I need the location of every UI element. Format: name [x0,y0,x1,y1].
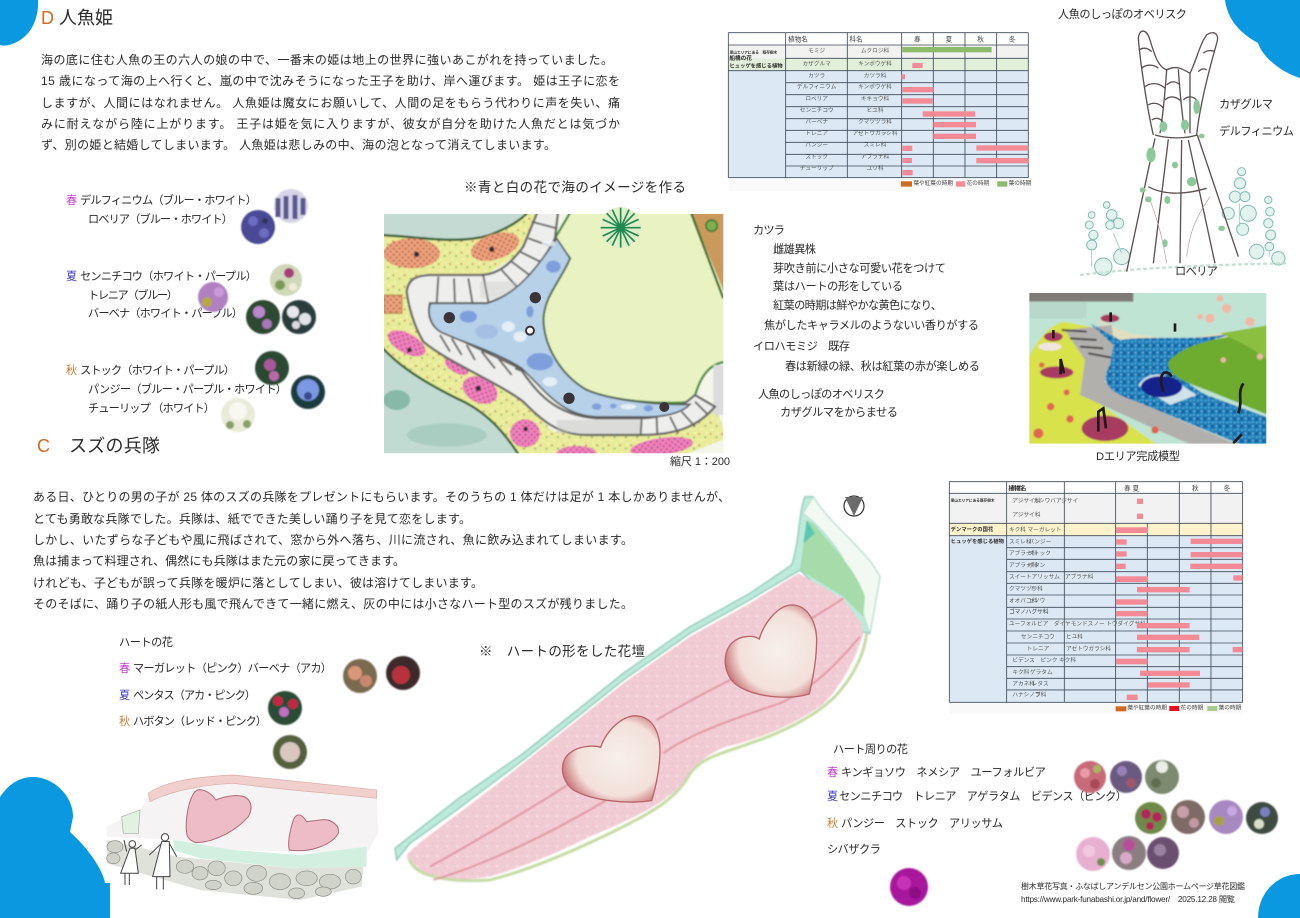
table: D area planting calendar: バーベナ [805,118,828,125]
table: C area planting calendar: ヒユ科 [1066,632,1083,640]
table: C area planting calendar: アジサイ科 [1012,511,1041,519]
table: C area planting calendar: カシワバアジサイ [1033,497,1078,504]
text block: D story [41,52,620,152]
table: C area planting calendar: ハナシノブ科 [1012,691,1047,699]
flower list: around hearts: ハート周りの花 [833,743,908,756]
heading: D 人魚姫: 人魚姫 [59,8,113,28]
lime bed [1027,322,1160,447]
caption: ハートの形: ※ ハートの形をした花壇 [479,644,645,659]
table: C area planting calendar: ラ [1035,692,1041,699]
table: D area planting calendar: 植物名 [788,34,808,43]
table: C area planting calendar: パンジー [1028,538,1052,545]
flower list: D area seasons: 秋 [66,363,77,377]
heading: C スズの兵隊: スズの兵隊 [69,436,160,456]
text block: plant notes: カツラ [753,224,785,237]
table: C area planting calendar: アブラナ科 [1065,573,1094,581]
walkway [407,210,715,435]
table: D area planting calendar [728,33,1032,191]
flower photos: hearts [268,656,420,769]
flower list: D area seasons [66,193,287,415]
flower list: hearts: マーガレット（ピンク）バーベナ（アカ） [133,662,332,675]
hearts [562,716,660,802]
table: C area planting calendar: 葉の時期 [1219,703,1242,711]
table: C area planting calendar: ゴマノハグサ科 [1009,608,1049,616]
table: D area planting calendar: アブラナ科 [861,152,889,160]
corner decoration: top right [1225,0,1300,78]
table: D area planting calendar: 船橋の花 [729,54,752,62]
caption: model: Dエリア完成模型 [1096,449,1180,463]
text block: D story: ず、別の姫と結婚してしまいます。 人魚姫は悲しみの中、海の泡となって消えてしまいます。 [41,137,556,152]
footer credit: 樹木草花写真・ふなばしアンデルセン公園ホームページ草花図鑑 [1021,881,1245,891]
table: D area planting calendar: スミレ科 [864,141,887,149]
table: C area planting calendar: アブラナ科 [1009,549,1038,557]
table: C area planting calendar: 春 夏 [1124,483,1140,492]
flower bed [380,210,727,457]
table: D area planting calendar: ストック [805,153,828,160]
flower list: hearts: ペンタス（アカ・ピンク） [133,689,256,702]
text block: D story: 海の底に住む人魚の王の六人の娘の中で、一番末の姫は地上の世界に強いあこがれを持っていました。 [41,52,613,67]
table: D area planting calendar: 葉の時期 [1009,179,1032,187]
table: C area planting calendar: ュソウ [1028,596,1045,604]
flower list: D area seasons: センニチコウ（ホワイト・パープル） [80,270,257,283]
table: D area planting calendar: 葉や紅葉の時期 [913,179,953,187]
flower list: D area seasons: ストック（ホワイト・パープル） [80,364,235,377]
table: C area planting calendar: トレニア [1027,645,1050,652]
table: D area planting calendar: ヒユ科 [867,106,884,114]
flower list: around hearts [827,743,1127,856]
table: C area planting calendar: 花の時期 [1181,703,1204,711]
text block: plant notes: 焦がしたキャラメルのようないい香りがする [764,318,979,332]
flower list: hearts: ハボタン（レッド・ピンク） [133,715,267,728]
table: D area planting calendar: ムクロジ科 [861,47,889,55]
table: D area planting calendar: 夏 [946,35,953,43]
table: D area planting calendar: カツラ科 [864,71,887,79]
caption: 海のイメージ: ※青と白の花で海のイメージを作る [464,180,686,195]
walkway [1065,325,1243,447]
table: C area planting calendar: 植物名 [1008,484,1026,492]
table: C area planting calendar: ヒュッゲを感じる植物 [951,537,1005,545]
table: D area planting calendar: ユリ科 [867,164,884,172]
green strip [173,840,367,868]
text block: D story: 15 歳になって海の上へ行くと、嵐の中で沈みそうになった王子を助け、岸へ運びます。 姫は王子に恋を [41,73,620,88]
flower list: D area seasons: ロベリア（ブルー・ホワイト） [88,212,233,226]
text block: plant notes: イロハモミジ 既存 [753,339,850,353]
table: C area planting calendar: 科名 [1011,484,1023,492]
icon: north marker [844,496,864,516]
plan drawing: D area pond map [380,207,727,461]
scale label: 縮尺 1：200 [670,454,730,468]
pond [429,238,690,417]
obelisk labels: デルフィニウム [1219,124,1294,138]
text block: C story: しかし、いたずらな子どもや風に飛ばされて、窓から外へ落ち、川に流され、魚に飲み込まれてしまいます。 [33,532,633,547]
table: C area planting calendar: 冬 [1224,483,1231,492]
table: C area planting calendar: オオバコ科 [1009,596,1038,604]
text block: C story: けれども、子どもが誤って兵隊を暖炉に落としてしまい、彼は溶けてしまいます。 [33,575,483,590]
pink beds [387,330,426,358]
table: C area planting calendar: スイートアリッサム [1009,574,1060,581]
people [121,834,177,889]
table: C area planting calendar: デンマークの国花 [951,525,994,533]
flower photos: around hearts [890,760,1278,906]
text block: C story [33,489,730,611]
obelisk labels: カザグルマ [1219,97,1273,111]
flower list: hearts: 夏 [119,689,130,702]
corner decoration: bottom left [0,777,110,918]
delphinium flowers [1085,168,1285,275]
footer credit: https://www.park-funabashi.or.jp/and/flower/ 2025.12.28 閲覧 [1021,894,1235,904]
table: C area planting calendar: 葉や紅葉の時期 [1127,703,1167,711]
island lawn [1168,333,1270,416]
flower list: around hearts: キンギョソウ ネメシア ユーフォルビア [841,766,1046,779]
table: D area planting calendar: 科名 [849,34,863,43]
table: C area planting calendar: ボタン [1028,561,1046,569]
tree symbol [600,207,641,248]
flower list: around hearts: シバザクラ [827,843,881,856]
table: C area planting calendar: ト [1030,587,1036,593]
red beds [383,238,440,268]
top left slope [384,214,526,240]
table: C area planting calendar: ビデンス ピンク キク科 [1012,656,1076,664]
obelisk labels: 人魚のしっぽのオベリスク [1058,8,1187,21]
table: D area planting calendar: 里山エリアにある 既存樹木 [730,49,778,54]
table: D area planting calendar: ロベリア [805,95,828,102]
elevation sketch: heart bed with people [107,775,378,900]
flower list: hearts [119,636,332,728]
flower list: D area seasons: デルフィニウム（ブルー・ホワイト） [80,193,257,207]
table: D area planting calendar: クマツヅラ科 [858,117,892,125]
flower list: D area seasons: バーベナ（ホワイト・パープル） [88,307,243,320]
obelisk labels: ロベリア [1175,266,1218,278]
lower slope [384,350,518,454]
text block: D story: みに耐えながら陸に上がります。 王子は姫を気に入りますが、彼女が自分を助けた人魚だとは気づか [41,116,620,131]
lower border [410,633,867,881]
stone wall [107,840,363,900]
text block: C story: ある日、ひとりの男の子が 25 体のスズの兵隊をプレゼントにもらいます。そのうちの 1 体だけは足が 1 本しかありませんが、 [33,489,730,504]
table: C area planting calendar: ゲラタム [1030,668,1053,676]
corner decoration: bottom right [1258,874,1300,918]
flower list: hearts: 秋 [119,714,130,728]
text block: C story: そのそばに、踊り子の紙人形も風で飛んできて一緒に燃え、灰の中には小さなハート型のスズが残りました。 [33,596,633,611]
table: C area planting calendar: アカネ科 [1012,679,1035,687]
text block: plant notes: 紅葉の時期は鮮やかな黄色になり、 [773,298,942,312]
river [1090,323,1270,447]
flower list: around hearts: センニチコウ トレニア アゲラタム ビデンス（ピンク） [839,789,1127,803]
inner lines [430,598,860,880]
flower list: around hearts: 春 [827,766,838,779]
heading: D 人魚姫: D [41,8,54,28]
table: C area planting calendar: 里山エリアにある既存樹木 [951,498,995,503]
table: C area planting calendar: スミレ科 [1009,537,1032,545]
table: C area planting calendar: ユーフォルビア ダイヤモンドスノー トウダイグサ科 [1009,620,1146,628]
text block: plant notes: カザグルマをからませる [780,405,898,419]
flower list: D area seasons: チューリップ （ホワイト） [88,402,215,415]
table: D area planting calendar: ヒュッゲを感じる植物 [729,62,783,70]
obelisk drawing [1080,31,1287,275]
table: C area planting calendar: レタス [1032,679,1049,687]
flower list: D area seasons: 春 [66,194,77,207]
hearts [186,790,251,843]
flower list: hearts: 春 [119,662,130,675]
corner decoration: top left [0,0,38,46]
text block: plant notes: 春は新緑の緑、秋は紅葉の赤が楽しめる [785,359,980,373]
flower list: D area seasons: トレニア（ブルー） [88,288,178,302]
plan drawing: heart flower bed [395,497,880,881]
text block: D story: しますが、人間にはなれません。 人魚姫は魔女にお願いして、人間の足をもらう代わりに声を失い、痛 [41,95,620,110]
table: D area planting calendar: 冬 [1009,34,1016,43]
table: D area planting calendar: カザグルマ [803,60,831,68]
text block: plant notes: 雌雄異株 [773,242,816,256]
flower list: around hearts: 秋 [827,816,838,830]
table: D area planting calendar: キンポウゲ科 [858,83,892,91]
table: D area planting calendar: アゼトウガラシ科 [852,129,898,137]
table: D area planting calendar: モミジ [808,48,825,55]
table: C area planting calendar: キク科 マーガレット [1009,526,1061,534]
table: C area planting calendar: キク科 [1012,668,1030,676]
flower list: around hearts: パンジー ストック アリッサム [841,817,1003,830]
flower photos: D area [198,189,325,432]
table: D area planting calendar: チューリップ [800,165,834,172]
table: D area planting calendar: 花の時期 [967,179,990,187]
text block: plant notes: 人魚のしっぽのオベリスク [758,388,885,401]
table: D area planting calendar: トレニア [805,130,828,137]
teal edge and north tip [395,497,880,860]
table: D area planting calendar: 春 [914,34,921,43]
flower list: hearts: ハートの花 [119,636,173,649]
brown corner [692,214,724,292]
text block: plant notes: 芽吹き前に小さな可愛い花をつけて [773,261,946,275]
table: D area planting calendar: センニチコウ [800,106,834,114]
obelisk labels [1058,8,1294,278]
flower list: D area seasons: 夏 [66,270,77,283]
tail fins [1138,31,1218,135]
green patch [800,520,865,617]
footer credit [1021,881,1245,904]
table: D area planting calendar: デルフィニウム [797,83,837,91]
text block: plant notes: 葉はハートの形をしている [773,279,903,293]
frame [1127,135,1238,272]
flower list: around hearts: 夏 [827,790,838,803]
table: C area planting calendar: ストック [1028,550,1051,557]
table: C area planting calendar: アジサイ科 [1012,496,1041,504]
heading: C スズの兵隊: C [37,436,50,456]
table: C area planting calendar: クマツヅラ科 [1009,585,1043,593]
table: D area planting calendar: パンジー [805,142,828,149]
table: C area planting calendar: センニチコウ [1021,632,1055,640]
table: D area planting calendar: カツラ [808,72,825,79]
lawn [543,210,727,403]
text block: C story: 魚は捕まって料理され、偶然にも兵隊はまた元の家に戻ってきます。 [33,553,405,568]
photo: D area completed model [1027,290,1270,447]
table: D area planting calendar: 秋 [977,34,984,43]
pink area [407,573,863,879]
table: C area planting calendar: アブラナ科 [1009,561,1038,569]
text block: C story: とても勇敢な兵隊でした。兵隊は、紙でできた美しい踊り子を見て恋をします。 [33,511,471,526]
text block: plant notes [753,224,980,419]
beds and trees [1040,314,1128,441]
table: D area planting calendar: キキョウ科 [861,94,889,102]
flower list: D area seasons: パンジー（ブルー・パープル・ホワイト） [88,382,287,396]
table: D area planting calendar: キンポウゲ科 [858,60,892,68]
table: C area planting calendar: アゼトウガラシ科 [1066,644,1111,652]
table: C area planting calendar [949,482,1243,714]
table: C area planting calendar: 秋 [1192,483,1199,492]
